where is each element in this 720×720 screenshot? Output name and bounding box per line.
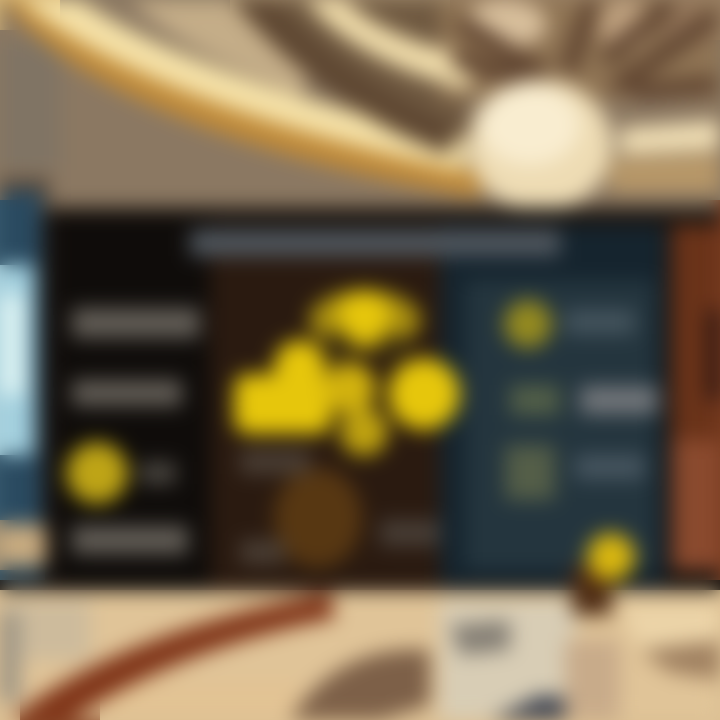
heading bar	[190, 230, 560, 256]
chandelier globe	[468, 79, 612, 211]
floor red streak	[10, 592, 335, 720]
chandelier branches	[460, 9, 710, 92]
wall section	[0, 178, 720, 590]
left floor object	[0, 524, 46, 702]
icon: left yellow circle	[66, 442, 128, 504]
ceiling curved bands	[5, 0, 720, 198]
lamp post	[565, 565, 620, 720]
central lower brown shape	[240, 450, 440, 568]
left panel text lines	[72, 308, 200, 554]
right panel icons and text lines	[504, 300, 658, 500]
window	[0, 190, 42, 580]
chandelier panes	[463, 0, 720, 52]
icon: yellow lamp	[587, 533, 635, 581]
floor	[0, 592, 720, 720]
central yellow cluster	[234, 290, 460, 456]
ceiling background	[0, 0, 720, 215]
